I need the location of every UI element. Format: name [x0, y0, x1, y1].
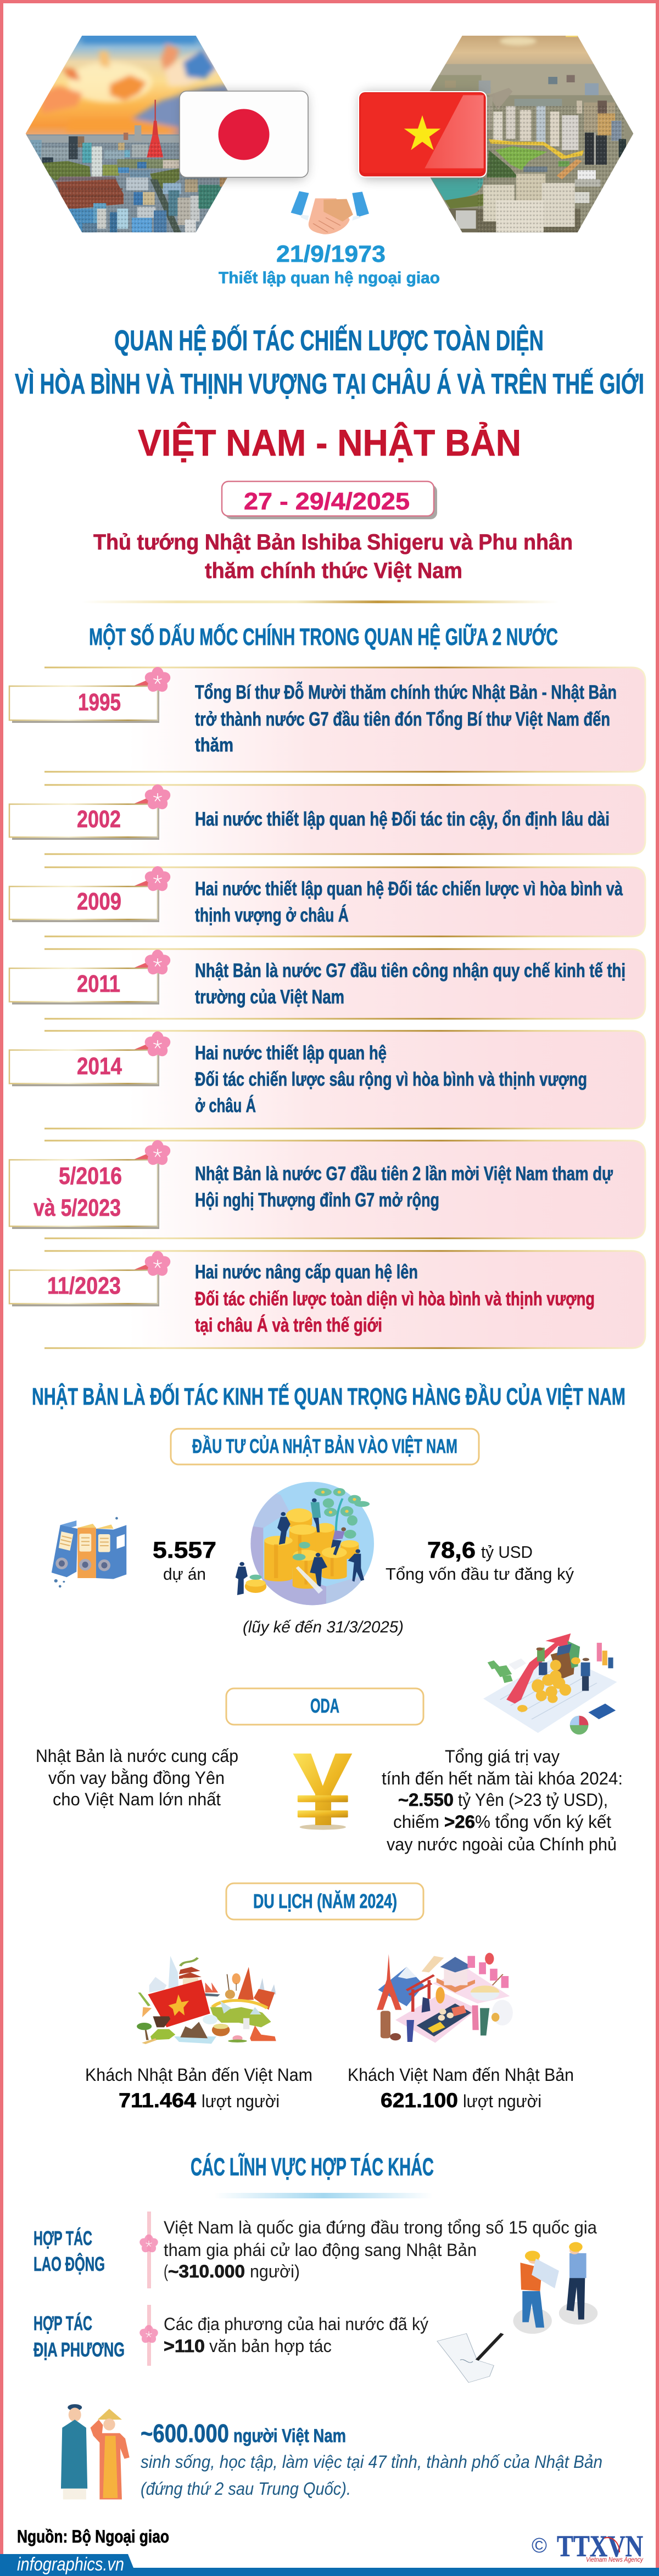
milestone text 2009	[195, 878, 623, 926]
milestone text 2016: Hội nghị Thượng đỉnh G7 mở rộng	[195, 1189, 439, 1211]
source: Nguồn: Bộ Ngoại giao	[17, 2527, 169, 2546]
callout: Vietnamese community in Japan: ~600.000	[141, 2419, 229, 2448]
text: total loan value: Tổng giá trị vay	[445, 1747, 560, 1766]
section label: ODA: ODA	[310, 1694, 339, 1717]
panel: labour cooperation: ~310.000	[168, 2261, 245, 2281]
year tag 2002	[9, 784, 172, 840]
year tag 2002: 2002	[77, 806, 121, 833]
stat: Vietnamese visitors to Japan: Khách Việt Nam đến Nhật Bản	[348, 2065, 574, 2085]
stat: projects: dự án	[163, 1564, 206, 1584]
panel: local cooperation: HỢP TÁC	[33, 2312, 92, 2334]
illustration: Vietnam tourism	[137, 1956, 276, 2044]
heading: other cooperation: CÁC LĨNH VỰC HỢP TÁC KHÁC	[191, 2153, 434, 2181]
stat: registered capital: 78,6	[427, 1537, 476, 1563]
date box: 27 - 29/4/2025: 27 - 29/4/2025	[244, 488, 410, 515]
panel: labour cooperation: HỢP TÁC	[33, 2227, 92, 2249]
stat: Vietnamese visitors to Japan: lượt người	[463, 2091, 541, 2111]
panel: milestone 2009	[9, 866, 645, 936]
milestone text 2011	[195, 960, 626, 1008]
panel: milestone 5/2016 and 5/2023	[9, 1140, 645, 1238]
panel: labour cooperation: LAO ĐỘNG	[33, 2252, 105, 2275]
heading: comprehensive strategic partnership	[15, 324, 644, 400]
text: total loan value: >26	[444, 1812, 475, 1832]
year tag 5/2016 and 5/2023: 5/2016	[59, 1163, 122, 1189]
illustration: finance	[483, 1634, 617, 1735]
year tag 5/2016 and 5/2023	[9, 1140, 172, 1229]
panel: local cooperation: >110	[164, 2336, 205, 2356]
milestone text 2016	[195, 1163, 613, 1211]
callout: Vietnamese community in Japan: người Việt Nam	[233, 2426, 346, 2446]
panel: labour cooperation: người)	[250, 2261, 300, 2281]
logo: TTXVN: ©	[532, 2534, 547, 2557]
panel: labour cooperation: Việt Nam là quốc gia đứng đầu trong tổng số 15 quốc gia	[164, 2218, 597, 2237]
illustration: Japan tourism	[377, 1953, 513, 2043]
stat: projects	[153, 1537, 216, 1584]
text: total loan value: vay nước ngoài của Chính phủ	[387, 1834, 617, 1854]
year tag 2009: 2009	[77, 888, 121, 915]
text: total loan value: tỷ Yên (>23 tỷ USD),	[458, 1790, 608, 1810]
flag: Japan	[180, 91, 308, 179]
callout: Vietnamese community in Japan: (đứng thứ 2 sau Trung Quốc).	[141, 2479, 351, 2499]
panel: milestone 11/2023	[9, 1251, 645, 1348]
stat: registered capital: tỷ USD	[481, 1542, 533, 1562]
illustration: workers with blueprint	[513, 2242, 597, 2334]
callout: Vietnamese community in Japan	[141, 2419, 602, 2499]
icon: binders	[52, 1517, 126, 1587]
text: total loan value	[382, 1747, 623, 1854]
milestone text 2014: ở châu Á	[195, 1095, 256, 1116]
text: largest yen lender	[36, 1746, 238, 1809]
milestone text 2009: thịnh vượng ở châu Á	[195, 904, 349, 926]
milestone text 2023	[195, 1261, 595, 1336]
stat: registered capital: Tổng vốn đầu tư đăng ký	[386, 1564, 574, 1584]
text: total loan value: tính đến hết năm tài khóa 2024:	[382, 1769, 623, 1788]
stat: Vietnamese visitors to Japan: 621.100	[381, 2089, 458, 2112]
year tag 11/2023: 11/2023	[47, 1272, 121, 1299]
panel: labour cooperation	[33, 2212, 597, 2288]
stat: Japanese visitors to Vietnam	[85, 2065, 312, 2112]
milestone text 1995: thăm	[195, 734, 233, 756]
photo: Tokyo skyline hexagon	[25, 36, 228, 233]
text: official visit: thăm chính thức Việt Nam	[205, 559, 462, 583]
text: official visit	[93, 530, 573, 583]
callout: Vietnamese community in Japan: sinh sống, học tập, làm việc tại 47 tỉnh, thành phố của Nhật Bản	[141, 2452, 602, 2472]
year tag 2011: 2011	[77, 970, 120, 997]
year tag 1995: 1995	[78, 689, 121, 716]
panel: local cooperation: ĐỊA PHƯƠNG	[33, 2338, 125, 2361]
milestone text 2023: Hai nước nâng cấp quan hệ lên	[195, 1261, 418, 1283]
year tag 2014: 2014	[77, 1053, 122, 1080]
year tag 1995	[9, 667, 172, 723]
year tag 5/2016 and 5/2023: và 5/2023	[33, 1194, 121, 1221]
stat: Japanese visitors to Vietnam: 711.464	[119, 2089, 196, 2112]
flag: Vietnam	[358, 91, 487, 179]
text: total loan value: chiếm	[393, 1812, 439, 1832]
photo: Vietnam city hexagon	[429, 36, 634, 233]
panel: local cooperation	[33, 2305, 428, 2366]
panel: local cooperation: văn bản hợp tác	[209, 2336, 332, 2356]
panel: milestone 1995	[9, 667, 645, 772]
icon: gold yen symbol	[293, 1754, 352, 1830]
stat: projects: 5.557	[153, 1537, 216, 1563]
year tag 2009	[9, 866, 172, 922]
year tag 11/2023	[9, 1251, 172, 1306]
text: largest yen lender: Nhật Bản là nước cung cấp	[36, 1746, 238, 1766]
year tag 2014	[9, 1031, 172, 1086]
stat: Japanese visitors to Vietnam: Khách Nhật Bản đến Việt Nam	[85, 2065, 312, 2085]
panel: milestone 2002	[9, 784, 645, 854]
section label: tourism	[226, 1883, 423, 1920]
milestone text 2014: Hai nước thiết lập quan hệ	[195, 1042, 387, 1064]
illustration: Vietnamese couple in ao dai	[61, 2404, 130, 2500]
text: total loan value: % tổng vốn ký kết	[475, 1812, 611, 1832]
stat: Japanese visitors to Vietnam: lượt người	[202, 2091, 280, 2111]
milestone text 2014	[195, 1042, 587, 1116]
year tag 2011	[9, 950, 172, 1004]
illustration: investment coins globe	[236, 1482, 376, 1608]
milestone text 2011: trường của Việt Nam	[195, 986, 344, 1008]
stat: registered capital	[386, 1537, 574, 1584]
illustration: signed paper and pen	[437, 2333, 502, 2383]
panel: labour cooperation: tham gia phái cử lao động sang Nhật Bản	[164, 2240, 477, 2260]
heading: Việt Nam - Nhật Bản: VIỆT NAM - NHẬT BẢN	[138, 422, 521, 464]
milestone text 1995	[195, 681, 617, 756]
date: 21/9/1973: 21/9/1973	[276, 241, 386, 267]
date box: 27 - 29/4/2025	[222, 481, 437, 519]
section label: investment	[171, 1429, 479, 1464]
panel: milestone 2014	[9, 1031, 645, 1129]
footer: infographics.vn bar	[0, 2554, 659, 2576]
stat: Vietnamese visitors to Japan	[348, 2065, 574, 2112]
text: total loan value: ~2.550	[398, 1790, 454, 1810]
panel: local cooperation: Các địa phương của hai nước đã ký	[164, 2314, 428, 2334]
icon: handshake	[291, 191, 369, 234]
subtitle: establish diplomatic relations: Thiết lập quan hệ ngoại giao	[219, 269, 440, 287]
text: largest yen lender: cho Việt Nam lớn nhất	[53, 1789, 221, 1809]
section label: investment: ĐẦU TƯ CỦA NHẬT BẢN VÀO VIỆT NAM	[192, 1434, 457, 1457]
note: cumulative date: (lũy kế đến 31/3/2025)	[243, 1618, 404, 1636]
footer: infographics.vn bar: infographics.vn	[17, 2554, 124, 2575]
panel: labour cooperation: (	[164, 2261, 168, 2281]
panel: milestone 2011	[9, 949, 645, 1019]
text: official visit: Thủ tướng Nhật Bản Ishiba Shigeru và Phu nhân	[93, 530, 573, 554]
logo: TTXVN: Vietnam News Agency	[586, 2556, 644, 2563]
milestone text 2023: tại châu Á và trên thế giới	[195, 1314, 382, 1336]
text: largest yen lender: vốn vay bằng đồng Yên	[48, 1768, 225, 1788]
logo: TTXVN	[532, 2529, 644, 2563]
section label: ODA	[226, 1688, 423, 1725]
section label: tourism: DU LỊCH (NĂM 2024)	[253, 1890, 397, 1912]
